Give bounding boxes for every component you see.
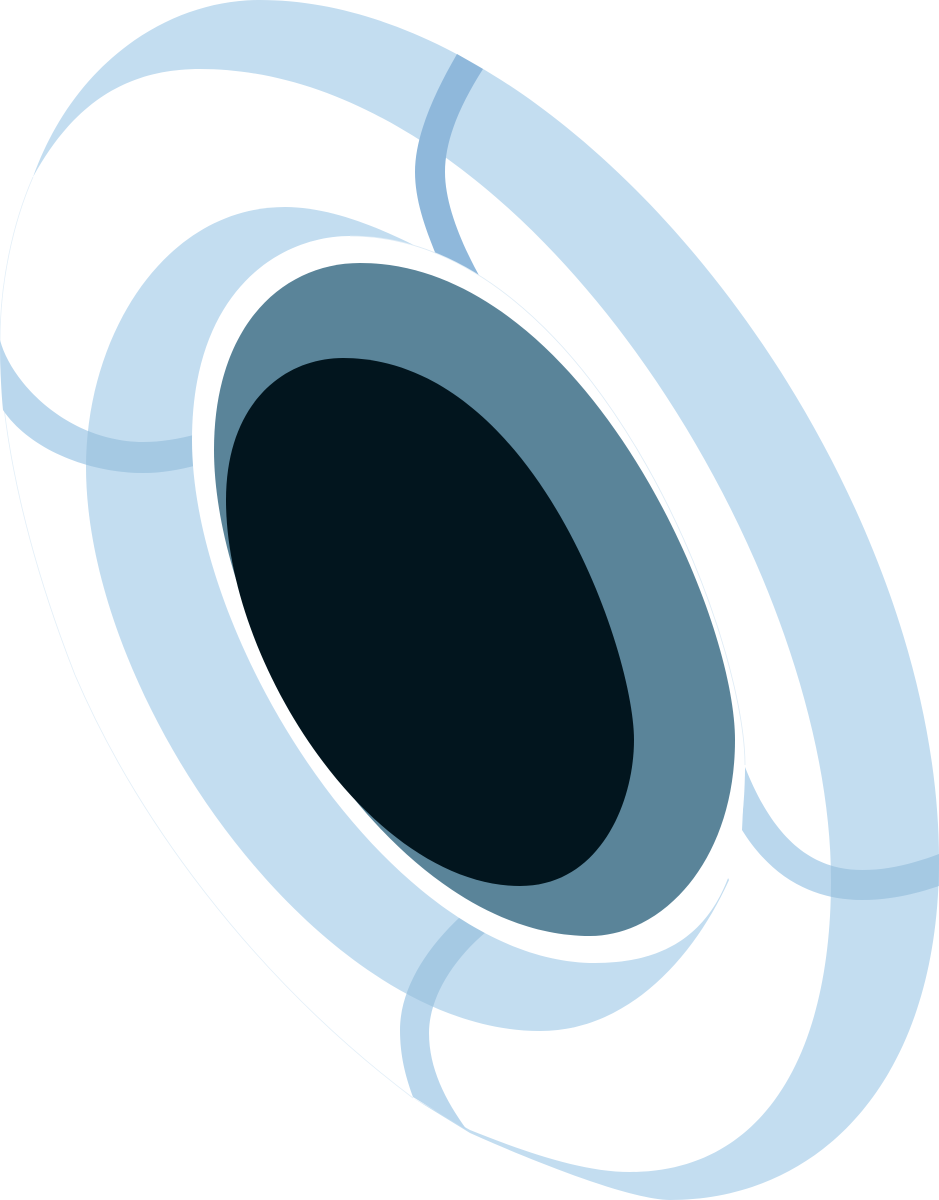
white gap hairline edge — [350, 236, 745, 765]
top connecting strip — [415, 54, 483, 279]
dark hole centre — [226, 358, 634, 886]
right connecting strip — [742, 767, 939, 900]
teal hole wall — [214, 263, 735, 936]
outer ring hairline edge — [0, 177, 413, 1098]
inner ring band — [86, 207, 729, 1031]
bottom connecting strip — [400, 917, 487, 1130]
white gap ellipse — [192, 236, 745, 963]
left connecting strip — [0, 340, 198, 473]
